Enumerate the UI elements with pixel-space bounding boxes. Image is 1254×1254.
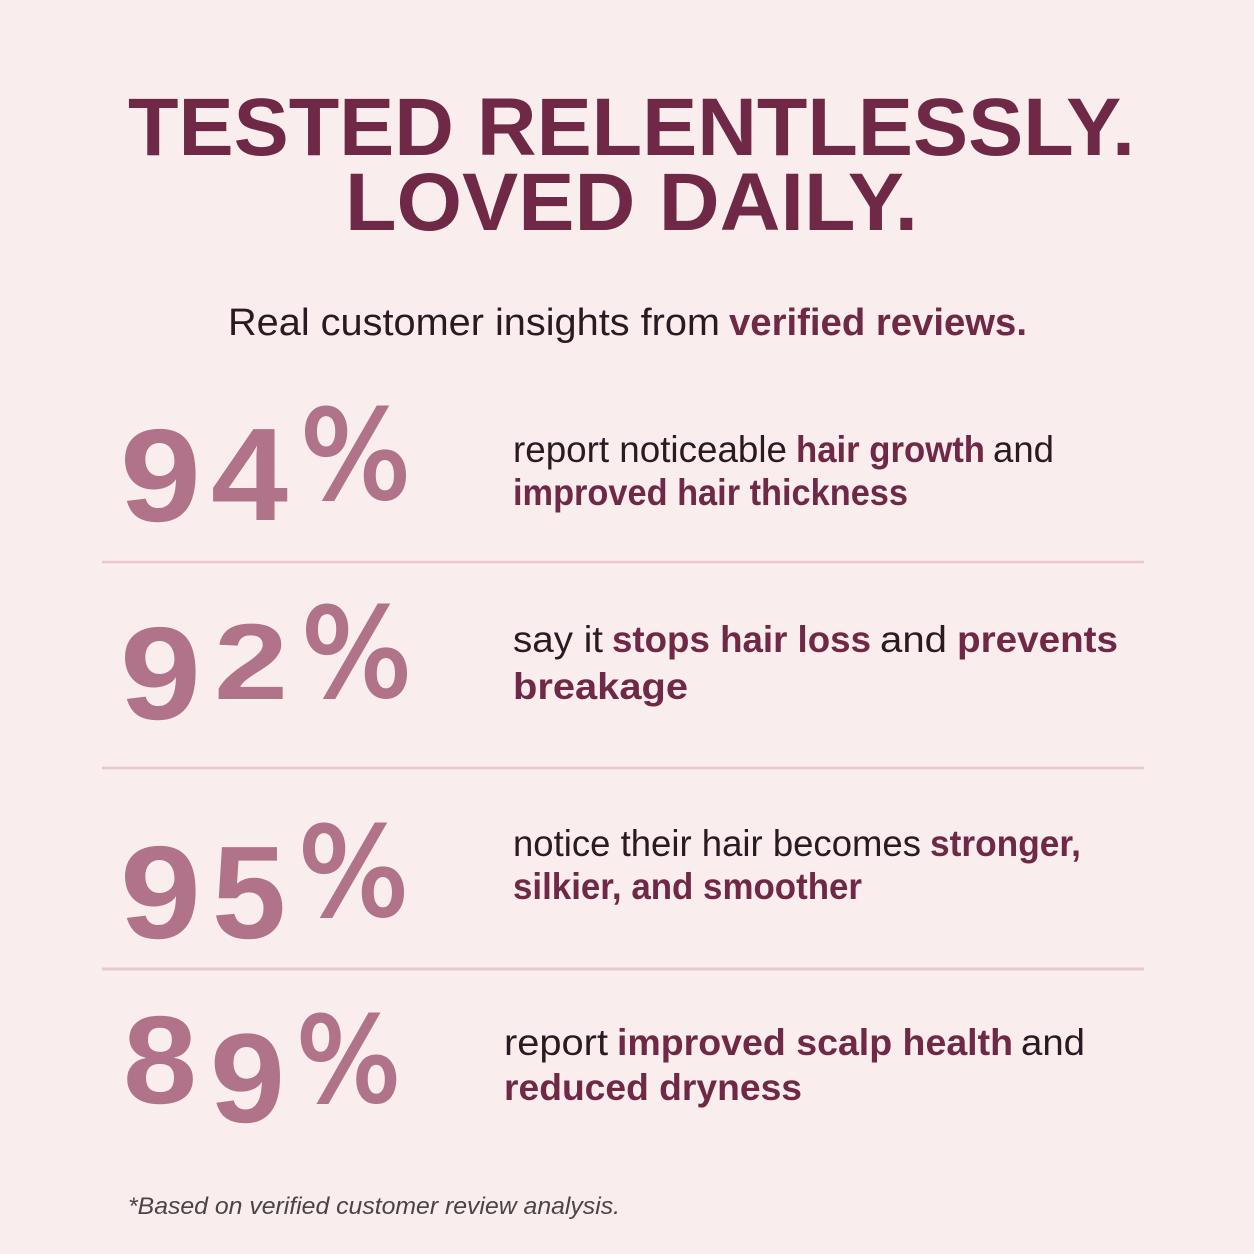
title: TESTED RELENTLESSLY.: [128, 82, 1135, 173]
stat row: 94%: [120, 385, 1054, 549]
stat text 89%: improved scalp health: [617, 1022, 1013, 1063]
stat text 92%: say it: [513, 619, 604, 660]
stat text 94%: hair growth: [796, 429, 985, 470]
stat text 92%: and: [880, 619, 947, 660]
stat text 89%: reduced dryness: [504, 1067, 802, 1108]
stat text 95%: silkier, and smoother: [513, 866, 862, 907]
stat number 95%: [120, 802, 409, 966]
stat number 92%: 2: [214, 601, 288, 722]
stat number 89%: %: [296, 992, 401, 1129]
stat number 89%: [123, 991, 401, 1149]
stat text 89%: and: [1021, 1022, 1085, 1063]
stat text 89%: report: [504, 1022, 609, 1063]
stat text 95%: notice their hair becomes: [513, 823, 921, 864]
stat row: 89%: [123, 991, 1085, 1149]
subtitle: [228, 302, 1027, 344]
footnote: *Based on verified customer review analysis.: [128, 1193, 620, 1220]
stat text 92%: prevents: [957, 619, 1118, 660]
stat number 92%: %: [301, 583, 412, 725]
stat text 94%: [513, 429, 1054, 513]
subtitle: Real customer insights from: [228, 302, 720, 344]
stat text 94%: report noticeable: [513, 429, 787, 470]
stat text 94%: and: [993, 429, 1054, 470]
stat row: 95%: [120, 802, 1081, 966]
stat number 92%: 9: [120, 600, 201, 747]
stat number 89%: 9: [210, 1007, 285, 1149]
stat text 95%: [513, 823, 1081, 907]
stat text 95%: stronger,: [930, 823, 1081, 864]
subtitle: verified reviews.: [729, 302, 1027, 344]
stat row: 92%: [120, 583, 1118, 747]
stat number 94%: 4: [211, 401, 288, 548]
stat number 95%: 9: [120, 819, 201, 966]
stat text 94%: improved hair thickness: [513, 472, 908, 513]
stat number 95%: %: [298, 802, 409, 944]
stat number 94%: 9: [120, 402, 201, 549]
stat text 92%: [513, 619, 1118, 707]
stat text 92%: breakage: [513, 666, 688, 707]
stat number 89%: 8: [123, 991, 197, 1130]
stat text 92%: stops hair loss: [612, 619, 871, 660]
stat number 94%: %: [300, 385, 411, 527]
stat text 89%: [504, 1022, 1085, 1108]
title: [128, 82, 1135, 248]
stat number 94%: [120, 385, 411, 549]
stat number 95%: 5: [212, 819, 286, 966]
title: LOVED DAILY.: [345, 157, 918, 248]
stat number 92%: [120, 583, 412, 747]
